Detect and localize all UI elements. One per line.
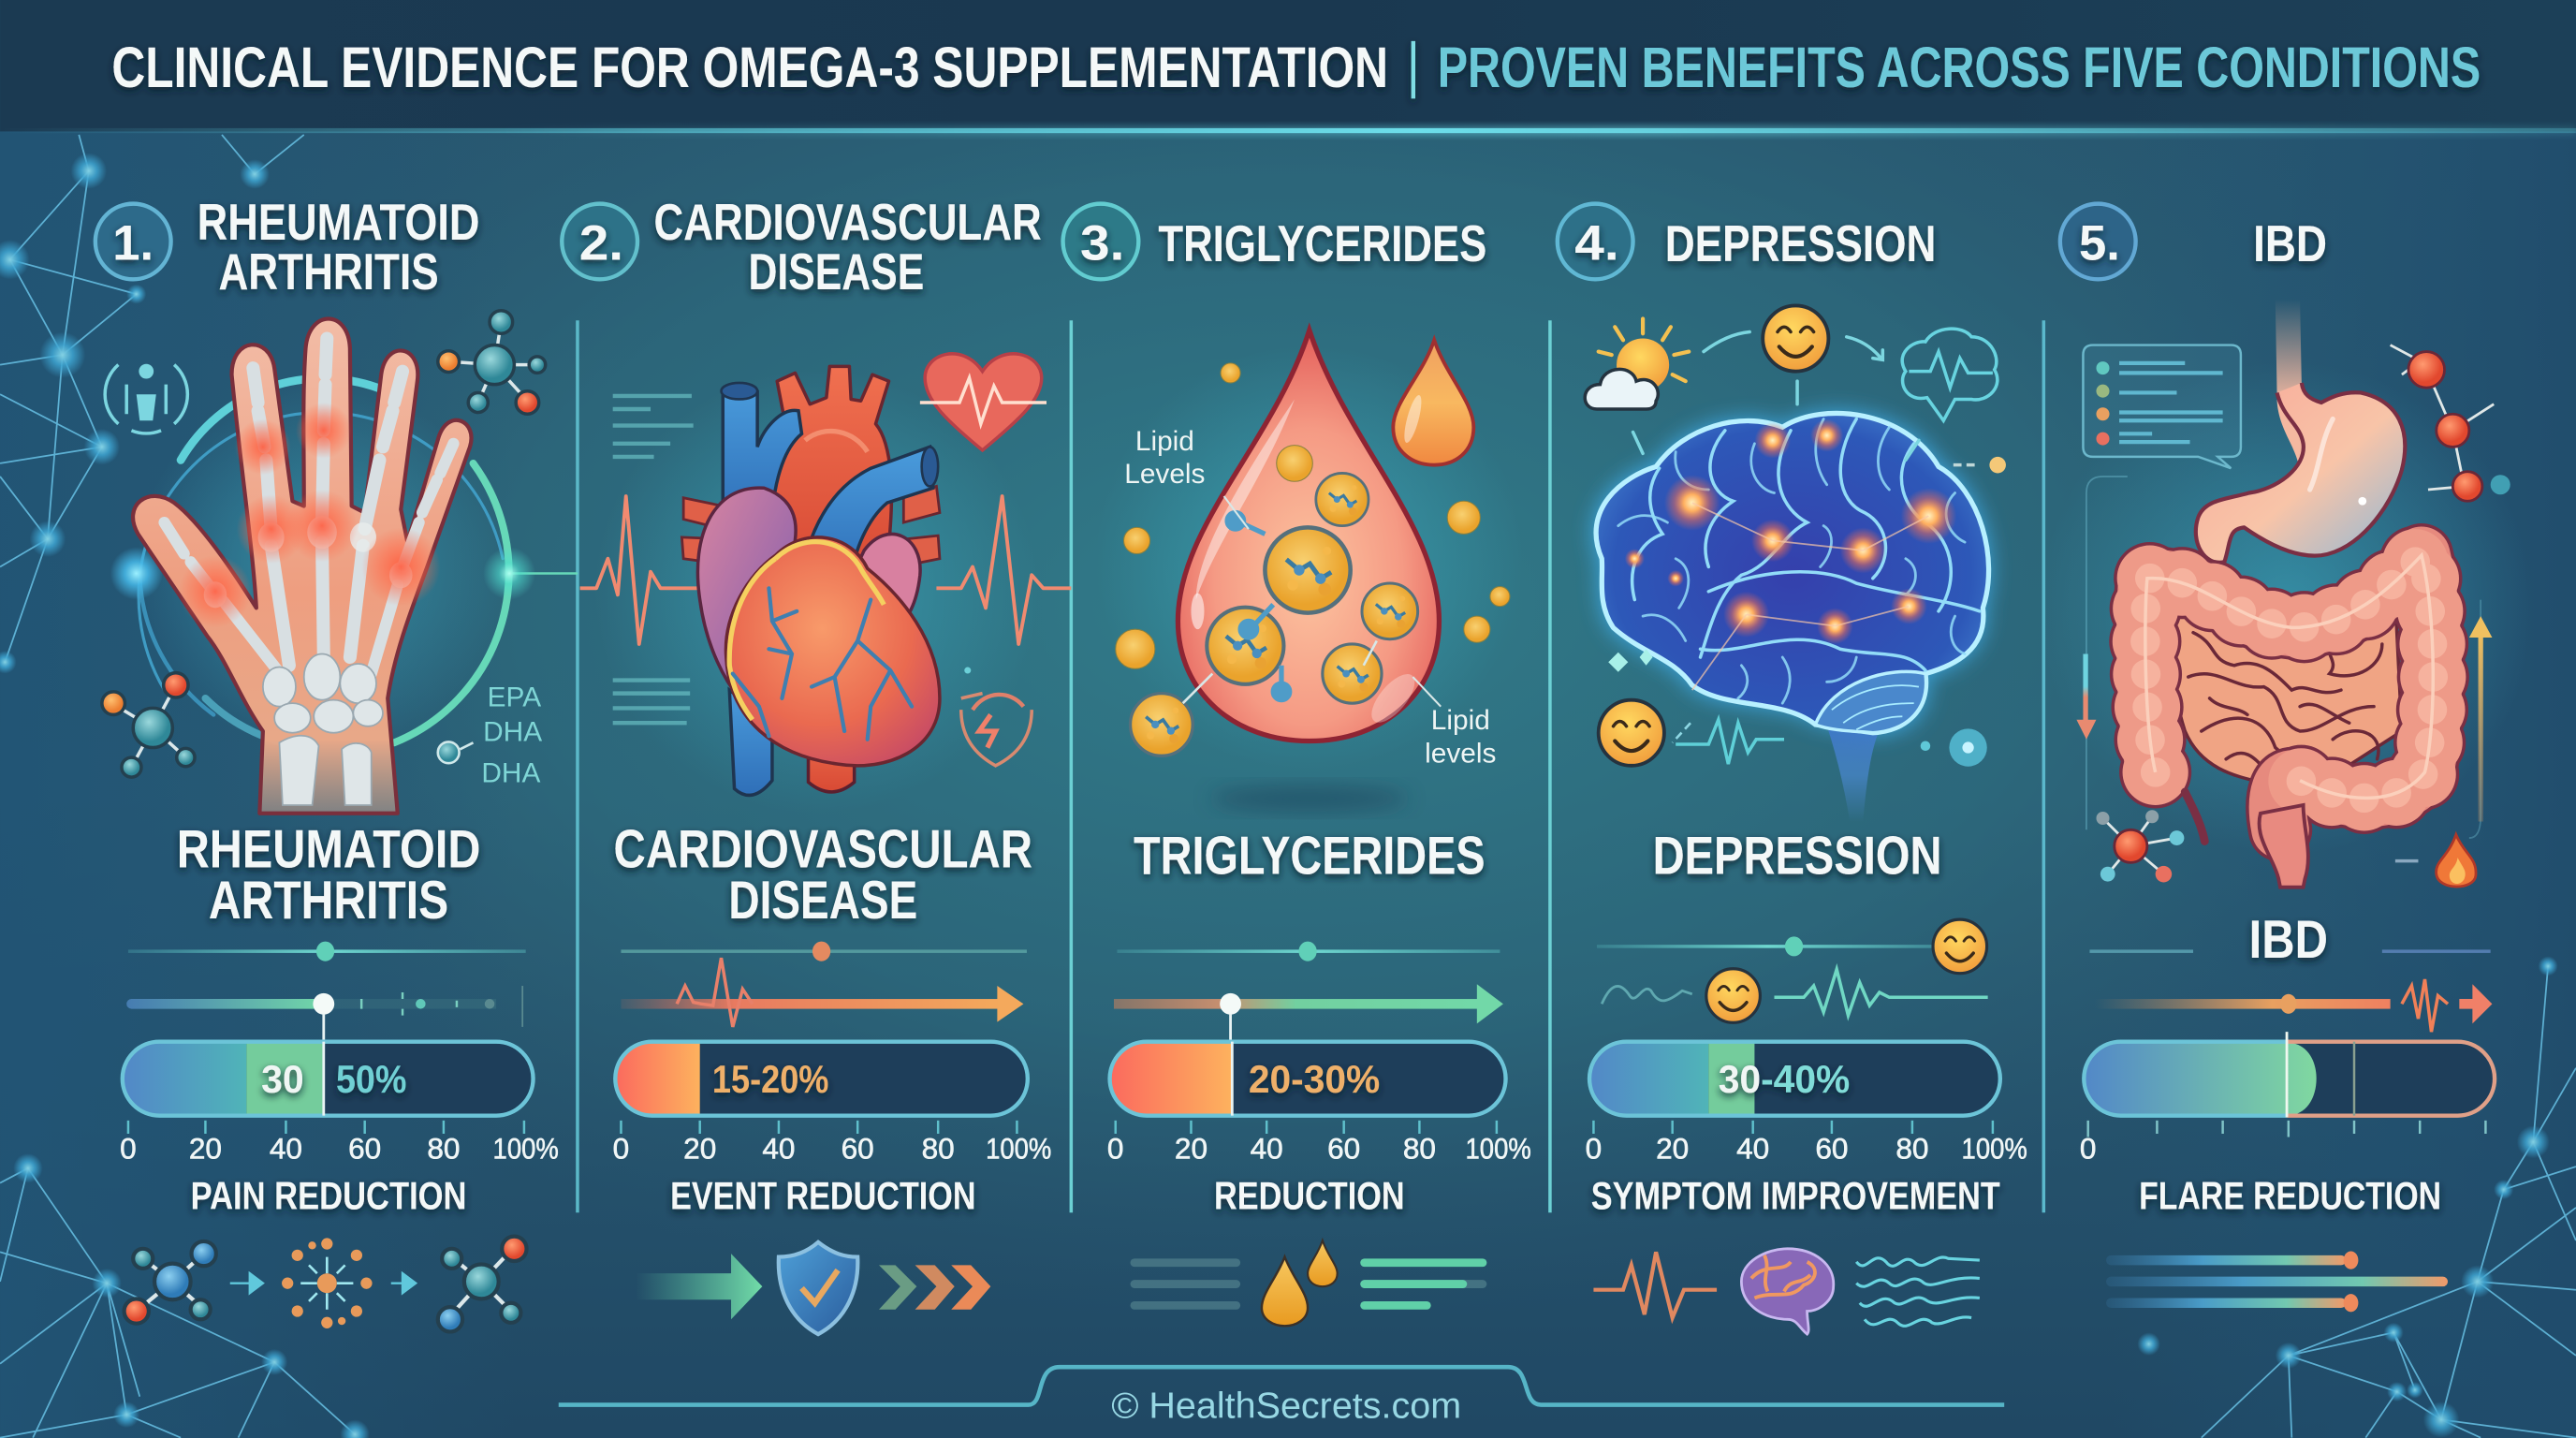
labels: EPA and DHA: DHA <box>481 757 540 788</box>
heading 2: cardiovascular disease: CARDIOVASCULAR <box>654 194 1042 251</box>
bar 4: 30-40% symptom improvement <box>1589 1042 2000 1116</box>
label: lipid levels right: levels <box>1425 738 1496 769</box>
axis 1: 60 <box>348 1131 381 1165</box>
tracker 4 waves with smiley <box>1602 969 1988 1022</box>
heading 1: rheumatoid arthritis: 1. <box>112 215 154 271</box>
axis 4 <box>1586 1121 2027 1165</box>
axis 3: 20 <box>1175 1131 1208 1165</box>
aortic arch and branches <box>771 366 891 575</box>
left atrium <box>851 534 920 627</box>
flow arrows beside intestines <box>2076 477 2492 838</box>
axis 5: 0 <box>2080 1131 2096 1165</box>
bar 1: 30-50% pain reduction: 50% <box>336 1057 406 1101</box>
neural sparks <box>1625 419 1956 644</box>
column dividers <box>578 320 2043 1212</box>
panel 4 title: DEPRESSION <box>1653 827 1942 887</box>
floating lipid dots <box>1116 363 1510 668</box>
axis 3: 100% <box>1466 1131 1531 1165</box>
axis 1: 0 <box>120 1131 137 1165</box>
icon: smiley top <box>1763 305 1828 372</box>
bar 3: 20-30% reduction: 20-30% <box>1249 1057 1380 1101</box>
slider 3 <box>1117 942 1500 961</box>
axis 4: 60 <box>1815 1131 1848 1165</box>
title <box>111 36 2481 100</box>
bar 2: 15-20% event reduction <box>615 1042 1028 1116</box>
panel 3 title: TRIGLYCERIDES <box>1134 827 1486 887</box>
inferior vena cava <box>729 690 772 795</box>
stomach <box>2196 383 2405 563</box>
panel 1 title <box>177 820 480 931</box>
axis 4: 0 <box>1586 1131 1602 1165</box>
axis 3: 40 <box>1251 1131 1283 1165</box>
tracker 1 <box>126 986 522 1040</box>
bones <box>165 339 453 677</box>
heading 2: cardiovascular disease: 2. <box>579 215 623 271</box>
bar 2: 15-20% event reduction: 15-20% <box>712 1057 828 1101</box>
axis 2: 0 <box>613 1131 629 1165</box>
panel 1 title: RHEUMATOID <box>177 820 480 880</box>
heading 3: triglycerides <box>1063 204 1486 279</box>
heading 4: depression: 4. <box>1574 215 1619 271</box>
bar 4: 30-40% symptom improvement: 30-40% <box>1719 1057 1850 1101</box>
inflamed joints <box>179 403 440 627</box>
illustration: lipid droplet <box>1096 330 1523 812</box>
label: lipid levels left <box>1124 426 1249 529</box>
footer tab with brand: © HealthSecrets.com <box>1111 1387 1461 1427</box>
heading 1: rheumatoid arthritis <box>95 194 480 301</box>
info card beside stomach <box>2083 345 2241 468</box>
lipid particles inside drop <box>1265 527 1351 613</box>
esophagus <box>2276 299 2321 477</box>
mood connector arrows <box>1633 332 1919 460</box>
large intestine outline <box>2145 555 2433 829</box>
panel 5 title: IBD <box>2249 910 2328 970</box>
icon: heart with pulse <box>920 354 1046 450</box>
axis 1: 80 <box>427 1131 460 1165</box>
icons: pulse, brain and waves <box>1593 1249 1980 1334</box>
text lines beside heart <box>613 396 694 723</box>
bar 3: 20-30% reduction <box>1110 1042 1506 1116</box>
axis 3: 80 <box>1403 1131 1436 1165</box>
metric label 2: EVENT REDUCTION <box>670 1174 976 1218</box>
slider 4 with smiley <box>1597 919 1987 974</box>
illustration: glowing brain <box>1592 410 1992 822</box>
label: lipid levels right <box>1412 677 1496 769</box>
heading 2: cardiovascular disease <box>562 194 1042 301</box>
labels: EPA and DHA: EPA <box>488 682 541 713</box>
network decoration: bottom-left <box>0 1153 370 1438</box>
icons: lipid lines and gold drops <box>1131 1240 1486 1326</box>
burst <box>282 1238 373 1328</box>
heading 5: ibd: IBD <box>2253 215 2327 272</box>
large intestine body <box>2145 555 2433 829</box>
icon: sun and cloud <box>1585 318 1689 409</box>
molecule below intestines <box>2096 810 2184 882</box>
slider 5 segments <box>2089 949 2491 953</box>
cerebellum <box>1815 671 1926 733</box>
right atrium <box>697 488 796 698</box>
pulmonary artery <box>802 447 933 579</box>
axis 2: 100% <box>986 1131 1051 1165</box>
panel 2 title: CARDIOVASCULAR <box>614 820 1032 880</box>
bar 5: flare reduction <box>2084 1032 2495 1117</box>
bar 1: 30-50% pain reduction <box>123 1042 534 1116</box>
axis 3: 60 <box>1327 1131 1360 1165</box>
pulse and dots near brain <box>1608 457 2006 767</box>
panel 2 title <box>614 820 1032 931</box>
axis 1 <box>120 1121 559 1165</box>
ecg lines behind heart <box>580 496 1071 644</box>
axis 4: 20 <box>1656 1131 1689 1165</box>
descending vessel <box>809 723 855 792</box>
icons: protection arrow, shield and chevrons <box>636 1242 990 1334</box>
tracker 5 <box>2095 979 2492 1032</box>
icon: flame <box>2395 835 2476 887</box>
rectum <box>2260 805 2308 888</box>
axis 1: 100% <box>493 1131 559 1165</box>
brain stem <box>1821 707 1882 822</box>
axis 4: 80 <box>1895 1131 1928 1165</box>
metric label 3: REDUCTION <box>1214 1174 1405 1218</box>
axis 2: 80 <box>922 1131 955 1165</box>
icon: mind with pulse bubble <box>1902 329 1998 420</box>
illustration: hand with inflamed joints <box>110 318 577 814</box>
heading 4: depression: DEPRESSION <box>1665 215 1936 272</box>
heading 5: ibd: 5. <box>2079 215 2120 271</box>
footer tab with brand <box>559 1367 2004 1427</box>
axis 2: 20 <box>683 1131 716 1165</box>
icon: smiley lower-left <box>1599 700 1664 766</box>
axis 1: 40 <box>270 1131 302 1165</box>
title: CLINICAL EVIDENCE FOR OMEGA-3 SUPPLEMENTATION <box>111 36 1388 100</box>
carpals and forearm <box>263 654 383 805</box>
axis 1: 20 <box>189 1131 222 1165</box>
axis 5 <box>2080 1121 2485 1165</box>
panel 2 title: DISEASE <box>728 871 917 931</box>
axis 2: 40 <box>762 1131 796 1165</box>
axis 4: 100% <box>1962 1131 2027 1165</box>
slider 2 <box>621 942 1027 961</box>
heading 3: triglycerides: TRIGLYCERIDES <box>1158 215 1486 272</box>
icons: molecule transformation <box>124 1237 527 1331</box>
heading 1: rheumatoid arthritis: RHEUMATOID <box>198 194 480 251</box>
icon: molecule bottom-left of hand <box>102 673 195 777</box>
treatment rings <box>110 378 577 748</box>
tracker 2 with pulse arrow <box>621 958 1023 1027</box>
label: lipid levels right: Lipid <box>1431 705 1490 736</box>
axis 3 <box>1107 1121 1531 1165</box>
network decoration: bottom-right <box>2137 956 2576 1438</box>
axis 2 <box>613 1121 1051 1165</box>
heading 4: depression <box>1558 204 1936 279</box>
icon: small oil drop <box>1393 340 1473 465</box>
tracker 3 <box>1114 984 1503 1040</box>
labels: EPA and DHA <box>438 682 542 788</box>
network decoration: top-left <box>0 135 304 674</box>
labels: EPA and DHA: DHA <box>483 717 542 748</box>
heading 3: triglycerides: 3. <box>1080 215 1124 271</box>
icons: flare reduction lines <box>2106 1251 2448 1312</box>
appendix <box>2185 792 2204 842</box>
coronary vessels <box>733 588 912 740</box>
ventricles <box>725 537 940 766</box>
folds <box>1618 419 1980 703</box>
slider 1 <box>128 942 526 961</box>
icon: molecule top-right of hand <box>438 311 546 414</box>
icon: shield with refresh <box>961 668 1032 766</box>
bar 1: 30-50% pain reduction: 30 <box>261 1057 304 1101</box>
icon: person in circle <box>105 364 187 433</box>
illustration: stomach and intestines <box>2041 299 2533 888</box>
illustration: anatomical heart <box>580 366 1071 814</box>
metric label 5: FLARE REDUCTION <box>2139 1174 2441 1218</box>
axis 4: 40 <box>1736 1131 1769 1165</box>
inflammation molecules right of stomach <box>2391 345 2510 501</box>
axis 3: 0 <box>1107 1131 1124 1165</box>
side vessels <box>681 486 940 565</box>
superior vena cava <box>723 384 802 522</box>
axis 2: 60 <box>842 1131 874 1165</box>
panel 1 title: ARTHRITIS <box>209 871 448 931</box>
heading 1: rheumatoid arthritis: ARTHRITIS <box>218 243 439 301</box>
small intestine <box>2173 600 2402 797</box>
heading 2: cardiovascular disease: DISEASE <box>748 243 924 301</box>
header band <box>0 0 2576 137</box>
metric label 4: SYMPTOM IMPROVEMENT <box>1591 1174 2000 1218</box>
label: lipid levels left: Lipid <box>1135 426 1194 457</box>
metric label 1: PAIN REDUCTION <box>191 1174 466 1218</box>
label: lipid levels left: Levels <box>1124 459 1205 490</box>
heading 5: ibd <box>2060 204 2327 279</box>
